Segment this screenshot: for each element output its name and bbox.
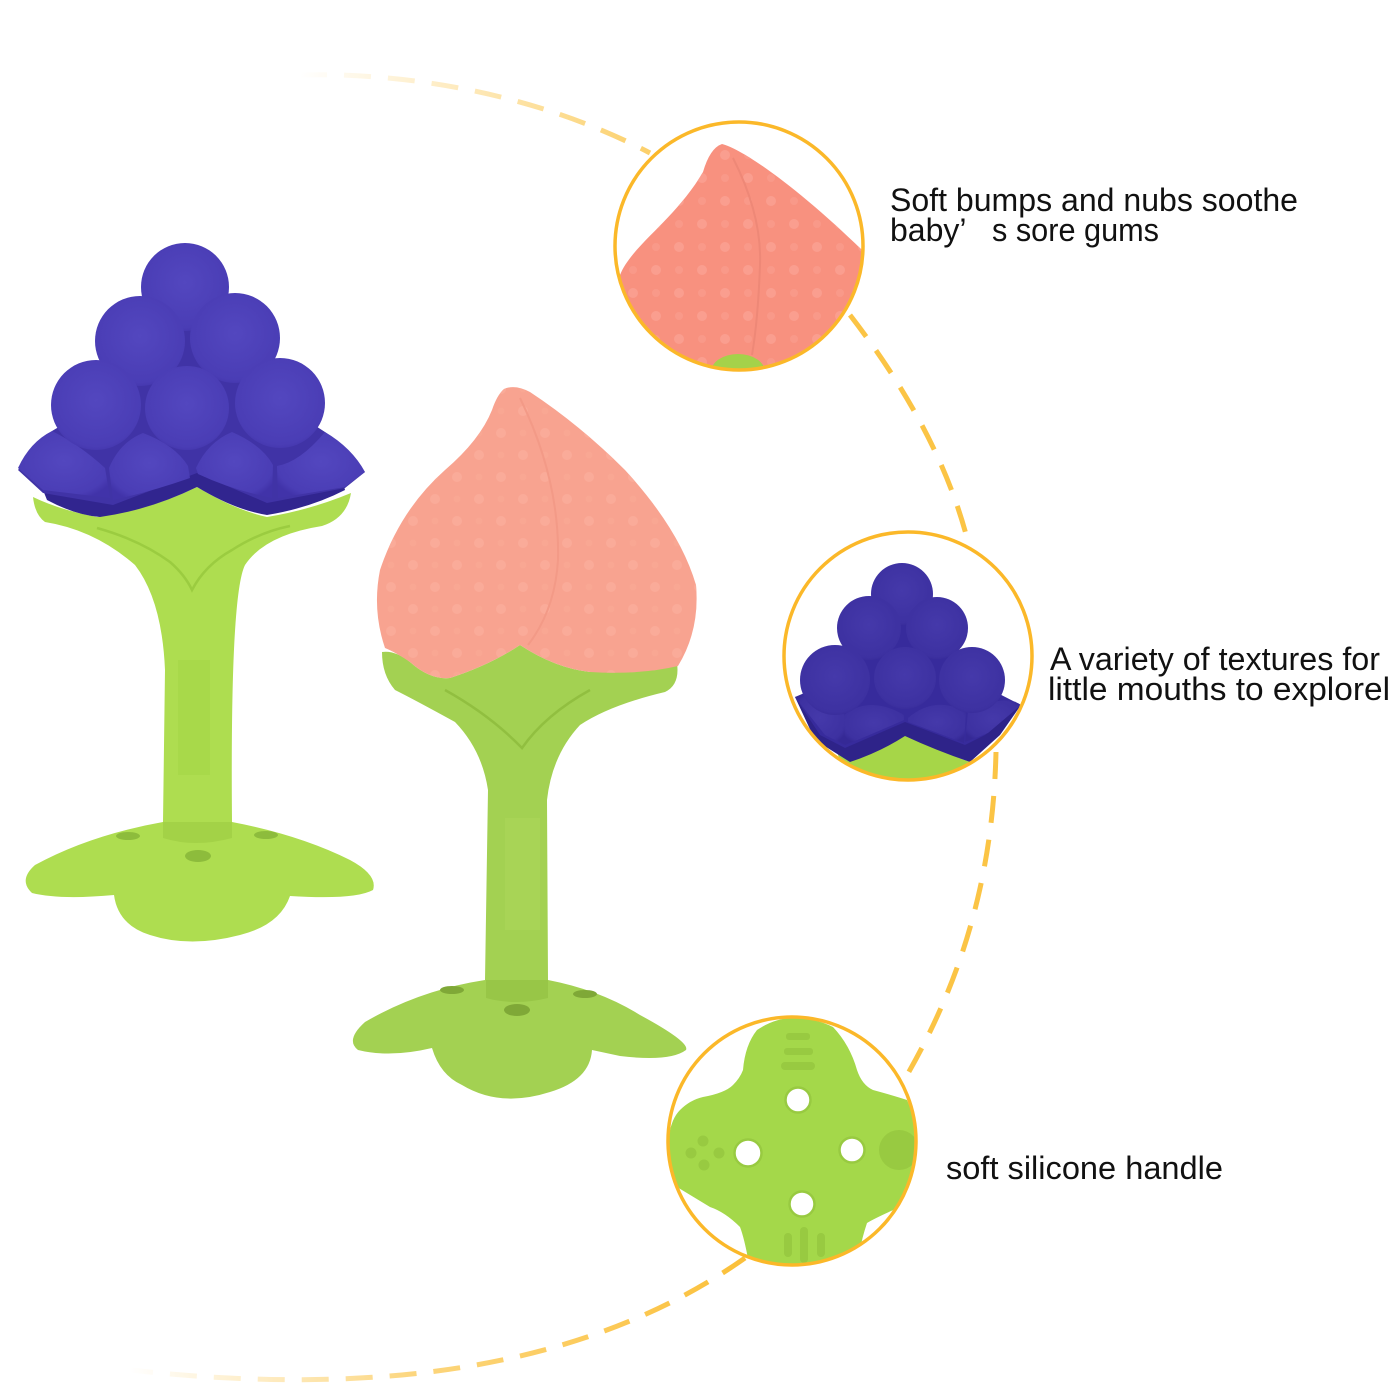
teether: peach [353,387,697,1099]
callout text: handle: soft silicone handle [946,1150,1223,1186]
nub [879,1130,914,1170]
teether: grape [18,243,374,942]
callout text: textures: A variety of textures for [1050,641,1380,677]
handle and base [26,487,374,942]
callout text: bumps: Soft bumps and nubs soothe [890,182,1298,218]
callout text: bumps [890,182,1298,248]
callout: handle detail [667,1017,925,1270]
callout: peach detail [613,120,865,372]
holes [116,831,278,862]
holes [734,1088,864,1216]
dashed connector arc [130,75,996,1380]
callout text: textures [1048,641,1390,707]
callout text: bumps: s sore gums [992,212,1159,248]
grape body [43,470,345,517]
callout: grape detail [784,532,1032,790]
callout text: textures: little mouths to explorel [1048,671,1390,707]
holes [440,986,597,1016]
callout text: bumps: baby’ [890,212,966,248]
peach fruit [377,387,697,678]
leaf handle and base [353,645,686,1099]
